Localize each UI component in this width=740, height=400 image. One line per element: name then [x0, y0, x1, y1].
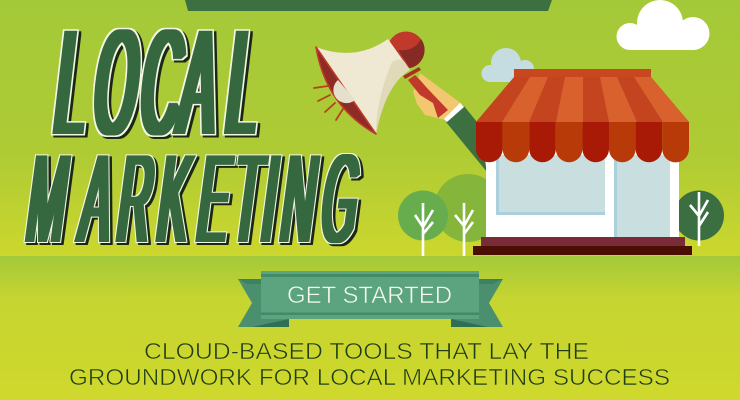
icon: white cloud	[616, 0, 710, 50]
awning	[476, 69, 689, 162]
icon: trees	[398, 174, 724, 256]
cuff	[444, 103, 464, 122]
ribbon: get started	[238, 271, 503, 327]
door	[614, 155, 670, 237]
background ground	[0, 256, 740, 400]
title: MARKETING: MARKETING	[20, 129, 367, 270]
title: LOCAL: LOCAL	[48, 0, 269, 166]
right ribbon tail	[451, 279, 503, 327]
building wall	[486, 150, 679, 237]
bell shading	[376, 60, 410, 134]
arm sleeve	[446, 106, 487, 172]
megaphone handle	[408, 75, 448, 118]
background sky	[0, 0, 740, 256]
sound lines	[314, 86, 343, 120]
head shading	[398, 39, 425, 68]
storefront	[473, 69, 692, 255]
subtitle	[69, 338, 670, 390]
icon: small cloud	[482, 48, 534, 82]
megaphone bell	[316, 39, 410, 134]
top banner	[185, 0, 552, 11]
ribbon label: GET STARTED	[287, 282, 452, 309]
ribbon body	[261, 271, 479, 319]
subtitle line 1: CLOUD-BASED TOOLS THAT LAY THE	[144, 338, 589, 364]
megaphone head	[388, 32, 424, 68]
subtitle line 2: GROUNDWORK FOR LOCAL MARKETING SUCCESS	[69, 364, 670, 390]
megaphone speaker	[333, 80, 355, 103]
hand	[413, 73, 462, 120]
window	[496, 155, 605, 215]
icon: megaphone and arm	[314, 32, 487, 172]
left ribbon tail	[238, 279, 289, 327]
upper step	[481, 237, 685, 246]
megaphone rim	[316, 47, 376, 134]
lower step	[473, 246, 692, 255]
